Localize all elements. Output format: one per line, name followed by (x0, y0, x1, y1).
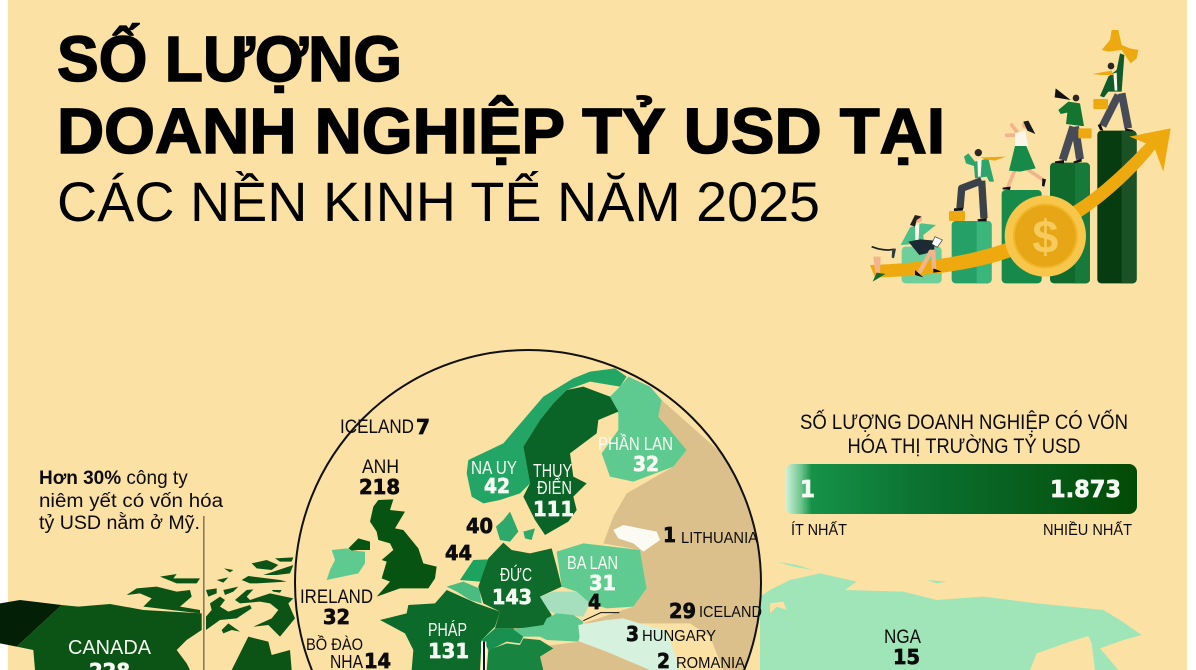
label: Netherlands: 44 (445, 541, 472, 565)
Belgium (447, 582, 482, 603)
Ireland (327, 548, 365, 580)
label: Russia (884, 627, 921, 669)
label: France: PHÁP (428, 620, 467, 640)
Micro-state markers (481, 642, 486, 670)
Denmark (496, 512, 535, 542)
label: Lithuania: 1 (663, 523, 676, 547)
label: UK (359, 457, 400, 499)
legend values: NHIỀU NHẤT (1043, 520, 1132, 539)
callout: share of US firms: niêm yết có vốn hóa (39, 491, 223, 512)
title: SỐ LƯỢNG (57, 23, 402, 95)
Balkans (540, 642, 650, 670)
label: Russia: 15 (893, 645, 920, 669)
label: Sweden (533, 461, 574, 521)
Hungary and Romania (578, 618, 680, 670)
Norway (467, 368, 627, 503)
callout: share of US firms (39, 468, 223, 534)
label: Norway: NA UY (471, 458, 517, 478)
United Kingdom (348, 499, 437, 597)
label: UK: ANH (362, 457, 399, 478)
label: 29 (669, 599, 762, 623)
callout: share of US firms: Hơn 30% công ty (39, 468, 188, 489)
Austria (513, 613, 583, 642)
Sweden (523, 387, 618, 535)
Netherlands (460, 559, 488, 582)
title (57, 23, 945, 233)
label: Germany (492, 564, 532, 609)
legend heading (800, 410, 1128, 458)
Lithuania (613, 525, 660, 552)
person with laptop (872, 215, 942, 282)
Czech Republic (540, 592, 590, 617)
gradient bar (785, 464, 1137, 514)
title: CÁC NỀN KINH TẾ NĂM 2025 (57, 170, 820, 233)
label: Poland: BA LAN (567, 553, 618, 573)
callout line (203, 516, 205, 670)
leader line (583, 613, 619, 621)
label: Lithuania (663, 523, 758, 547)
climbing man (949, 149, 1006, 221)
title: DOANH NGHIỆP TỶ USD TẠI (57, 94, 945, 167)
label: Canada: CANADA (68, 637, 152, 659)
coin: $ (1032, 211, 1058, 263)
label: Lithuania: LITHUANIA (681, 530, 758, 547)
Russia edge (744, 606, 759, 666)
Italy (487, 638, 553, 670)
legend heading: SỐ LƯỢNG DOANH NGHIỆP CÓ VỐN (800, 410, 1128, 434)
legend heading: HÓA THỊ TRƯỜNG TỶ USD (848, 435, 1080, 458)
label: France: 131 (428, 639, 469, 663)
label: Hungary: 3 (626, 622, 639, 646)
label: 29: 29 (669, 599, 696, 623)
bars (902, 131, 1137, 283)
Poland (557, 543, 647, 608)
label: Norway: 42 (484, 474, 510, 498)
callout: share of US firms: tỷ USD nằm ở Mỹ. (39, 512, 200, 534)
label: Iceland: 7 (416, 415, 430, 439)
legend (785, 410, 1137, 539)
map: Russia (760, 562, 1142, 670)
label: UK: 218 (359, 475, 400, 499)
France (380, 590, 500, 670)
label: Sweden: 111 (533, 497, 574, 521)
label: Sweden: ĐIỂN (537, 477, 572, 498)
label: Finland (598, 433, 673, 476)
label: France (428, 620, 469, 663)
label: Finland: 32 (633, 452, 659, 476)
arrow (870, 128, 1171, 277)
man with trophy (1092, 30, 1138, 131)
label: Poland: 31 (589, 571, 616, 595)
Germany (478, 543, 562, 628)
label: Norway (471, 458, 517, 498)
Finland (602, 377, 687, 482)
label: Portugal (306, 635, 391, 670)
label: Poland (567, 553, 618, 595)
label: Hungary: HUNGARY (642, 628, 716, 645)
label: Iceland: ICELAND (340, 417, 414, 438)
man with megaphone (1055, 88, 1092, 163)
Switzerland (482, 628, 523, 650)
label: Ireland: IRELAND (300, 587, 373, 608)
label: Sweden: THỤY (533, 461, 572, 481)
label: Romania (657, 649, 745, 670)
label: Finland: PHẦN LAN (598, 433, 673, 454)
label: Czech: 4 (588, 590, 601, 614)
label: Canada (68, 637, 152, 670)
map: inset circle of Europe (295, 350, 770, 670)
label: Ireland: 32 (323, 605, 350, 629)
label: Hungary (626, 622, 716, 646)
label: Germany: ĐỨC (500, 564, 532, 585)
label: 29: ICELAND (699, 604, 762, 621)
illustration: growth bars, arrow, coin and climbing people (870, 30, 1171, 283)
legend values: 1.873 (1050, 477, 1121, 503)
legend values: ÍT NHẤT (791, 520, 847, 539)
woman in skirt (1003, 121, 1046, 190)
label: Ireland (300, 587, 373, 629)
map: Canada and Alaska (0, 557, 295, 670)
legend values (791, 477, 1132, 539)
country labels (68, 415, 921, 670)
legend values: 1 (800, 477, 815, 503)
coin (1005, 195, 1086, 277)
label: Russia: NGA (884, 627, 921, 648)
label: Denmark: 40 (466, 514, 493, 538)
label: Germany: 143 (492, 585, 532, 609)
eastern Europe (583, 400, 767, 670)
label: Portugal: BỒ ĐÀO (306, 635, 363, 654)
